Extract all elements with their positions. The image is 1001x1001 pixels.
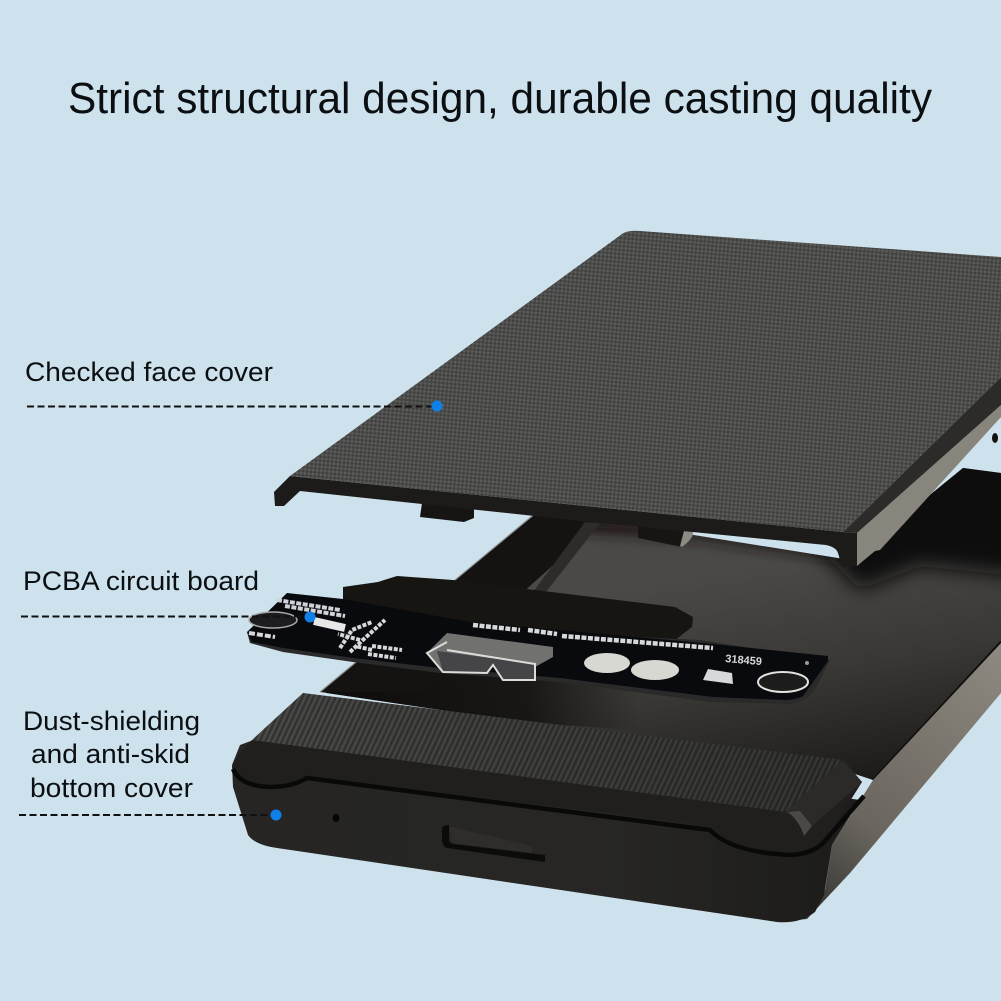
cover clips [420,503,693,547]
LED hole [332,814,340,822]
enclosure tray interior [320,468,1001,780]
cover front lip [274,476,857,567]
capacitors [584,653,630,673]
callout: checked face cover: Checked face cover [25,357,273,387]
board hole [805,661,809,665]
callout: dust-shielding bottom cover [19,706,282,820]
left traces [249,600,402,658]
top lip shoulder [232,740,862,853]
left mounting ring [249,612,297,628]
SATA connector [343,576,693,640]
corner highlight [788,811,812,836]
seam shadow [233,769,864,855]
right mounting ring [758,672,808,692]
board [247,593,828,700]
callout: dust-shielding bottom cover: and anti-skid [31,739,190,769]
callout: checked face cover [25,357,442,412]
striped grip [252,693,843,812]
checked face cover [274,231,1001,567]
pad row [473,625,713,648]
micro USB port [427,633,553,680]
callout: PCBA circuit board [21,566,316,622]
cover checked top surface [290,231,1001,532]
silkscreen code: 318459 [725,653,762,668]
front wall [232,720,860,922]
title: Strict structural design, durable casting quality [68,74,932,123]
USB slot [442,825,545,862]
PCBA circuit board [247,593,830,704]
corner chamfer [785,760,862,826]
chip mark [703,669,733,684]
right side wall [777,643,1001,922]
grip shading [252,693,843,812]
cover side band [843,377,1001,533]
small screw behind cover [992,433,998,443]
bottom cover enclosure [232,643,1001,922]
callout: dust-shielding bottom cover: Dust-shielding [23,706,200,736]
callout: dust-shielding bottom cover: bottom cover [30,773,193,803]
cover underside grey strip [857,405,1001,566]
board edge [247,620,830,704]
callout: PCBA circuit board: PCBA circuit board [23,566,259,596]
